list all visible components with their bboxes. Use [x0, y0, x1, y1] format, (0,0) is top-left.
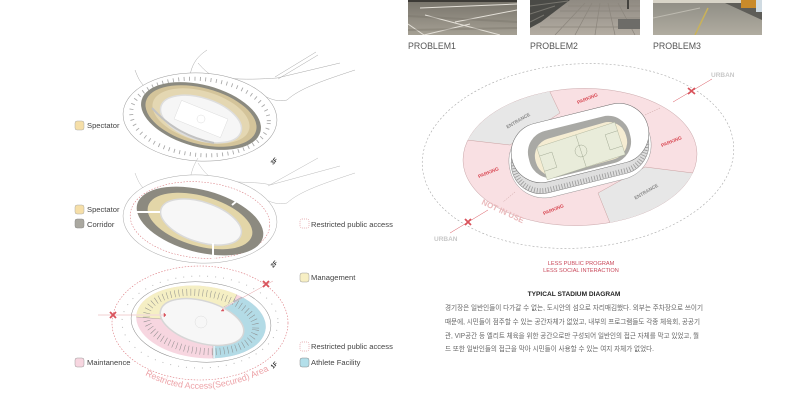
- legend: restricted public access level 1: Restricted public access: [311, 342, 393, 351]
- field: [155, 190, 247, 254]
- label: urban upper: URBAN: [711, 72, 735, 79]
- outer ring: [121, 69, 279, 165]
- label: 3F: 3F: [270, 157, 280, 166]
- boundary: outer dashed ellipse: [416, 53, 740, 259]
- legend: athlete facility: Athlete Facility: [311, 358, 361, 367]
- legend: restricted public access level 2: Restricted public access: [311, 220, 393, 229]
- football pitch: [537, 122, 625, 180]
- site plan: level 1: [98, 266, 288, 390]
- text block: description: 경기장은 일반인들이 다가갈 수 없는, 도시안의 섬으로 자리매김했다. 외부는 주차장으로 쓰이기: [445, 303, 703, 312]
- legend: corridor: Corridor: [87, 220, 115, 229]
- stand gaps: [136, 200, 238, 262]
- labels: parking and entrance: PARKING: [542, 203, 565, 217]
- legend: maintanence: Maintanence: [87, 358, 130, 367]
- outer ring dotted: [121, 171, 279, 267]
- field: [155, 86, 247, 152]
- corridor and spectator stands: [129, 174, 271, 268]
- label: restricted area: [145, 370, 270, 389]
- text block: description: 드 또한 일반인들의 접근을 막아 시민들이 사용할 수 있는 여지 자체가 없었다.: [445, 344, 654, 353]
- diagram: typical stadium: [422, 63, 734, 249]
- spectator stands: [134, 70, 268, 162]
- label: not in use: NOT IN USE: [480, 198, 526, 225]
- text block: description: 관, VIP공간 등 엘리트 체육을 위한 공간으로만 구성되어 일반인의 접근 자체를 막고 있었고, 뭘: [445, 331, 699, 340]
- text block: description: 때문에, 시민들이 점주할 수 있는 공간자체가 없었고, 내부의 프로그램들도 각종 체육회, 공공기: [445, 317, 700, 326]
- labels: parking and entrance: ENTRANCE: [633, 182, 660, 201]
- zone gaps: [135, 302, 234, 358]
- labels: parking and entrance: PARKING: [477, 166, 500, 180]
- white apron around stadium: [501, 101, 659, 205]
- building outline: [128, 277, 274, 367]
- field: [155, 290, 249, 354]
- photo: problem 2 paved walkway: [530, 0, 640, 35]
- label: problem 1: PROBLEM1: [408, 41, 456, 51]
- restricted boundary: [112, 266, 288, 380]
- legend: corridor: [75, 219, 115, 229]
- site dots: [122, 276, 278, 368]
- red X: right access: [221, 281, 273, 311]
- photo: problem 1 parking lot: [408, 0, 517, 35]
- stadium body: [505, 108, 655, 200]
- labels: parking and entrance: ENTRANCE: [505, 111, 532, 130]
- building zones: [136, 286, 266, 358]
- label: problem 2: PROBLEM2: [530, 41, 578, 51]
- floorplan hatching: [142, 286, 260, 358]
- roads: [135, 50, 355, 101]
- stands: [523, 111, 636, 183]
- label: problem 3: PROBLEM3: [653, 41, 701, 51]
- site plan: level 2: [121, 158, 355, 269]
- red X: left access: [98, 312, 166, 318]
- facade ribs: [508, 112, 652, 196]
- roads: [135, 158, 355, 204]
- zone: athlete facility: [212, 297, 266, 358]
- ring ticks: [128, 73, 272, 161]
- pitch surround: [531, 118, 631, 180]
- labels: parking and entrance: PARKING: [576, 92, 599, 106]
- centre circle: [195, 316, 207, 328]
- parking ring: [461, 84, 699, 230]
- track edge shadow: [152, 108, 214, 143]
- legend: spectator level 3: Spectator: [87, 121, 120, 130]
- pitch: [174, 100, 228, 138]
- text block: description: [445, 303, 703, 353]
- label: 1F: 1F: [270, 361, 280, 370]
- restricted dashed line: [127, 176, 273, 264]
- text: less public program: LESS PUBLIC PROGRAM: [548, 261, 615, 267]
- stadium roof: [505, 97, 655, 189]
- zone: maintenance: [136, 286, 266, 358]
- red X: upper right: [673, 79, 712, 102]
- text: less social interaction: LESS SOCIAL INTERACTION: [543, 268, 619, 274]
- legend: management: Management: [311, 273, 356, 282]
- labels: parking and entrance: PARKING: [660, 135, 683, 149]
- entrance zones: [468, 92, 692, 222]
- labels: parking and entrance: [477, 92, 683, 217]
- label: urban lower: URBAN: [434, 236, 458, 243]
- red X: lower left: [450, 210, 488, 233]
- legend: spectator level 2: Spectator: [87, 205, 120, 214]
- label: 2F: 2F: [270, 260, 280, 269]
- site plan: level 1: Restricted Access(Secured) Area: [146, 367, 269, 390]
- photo: problem 3 service road: [653, 0, 762, 35]
- zone: management: [136, 286, 238, 320]
- heading: typical stadium diagram: TYPICAL STADIUM DIAGRAM: [528, 291, 621, 298]
- site plan: level 3: [121, 50, 355, 166]
